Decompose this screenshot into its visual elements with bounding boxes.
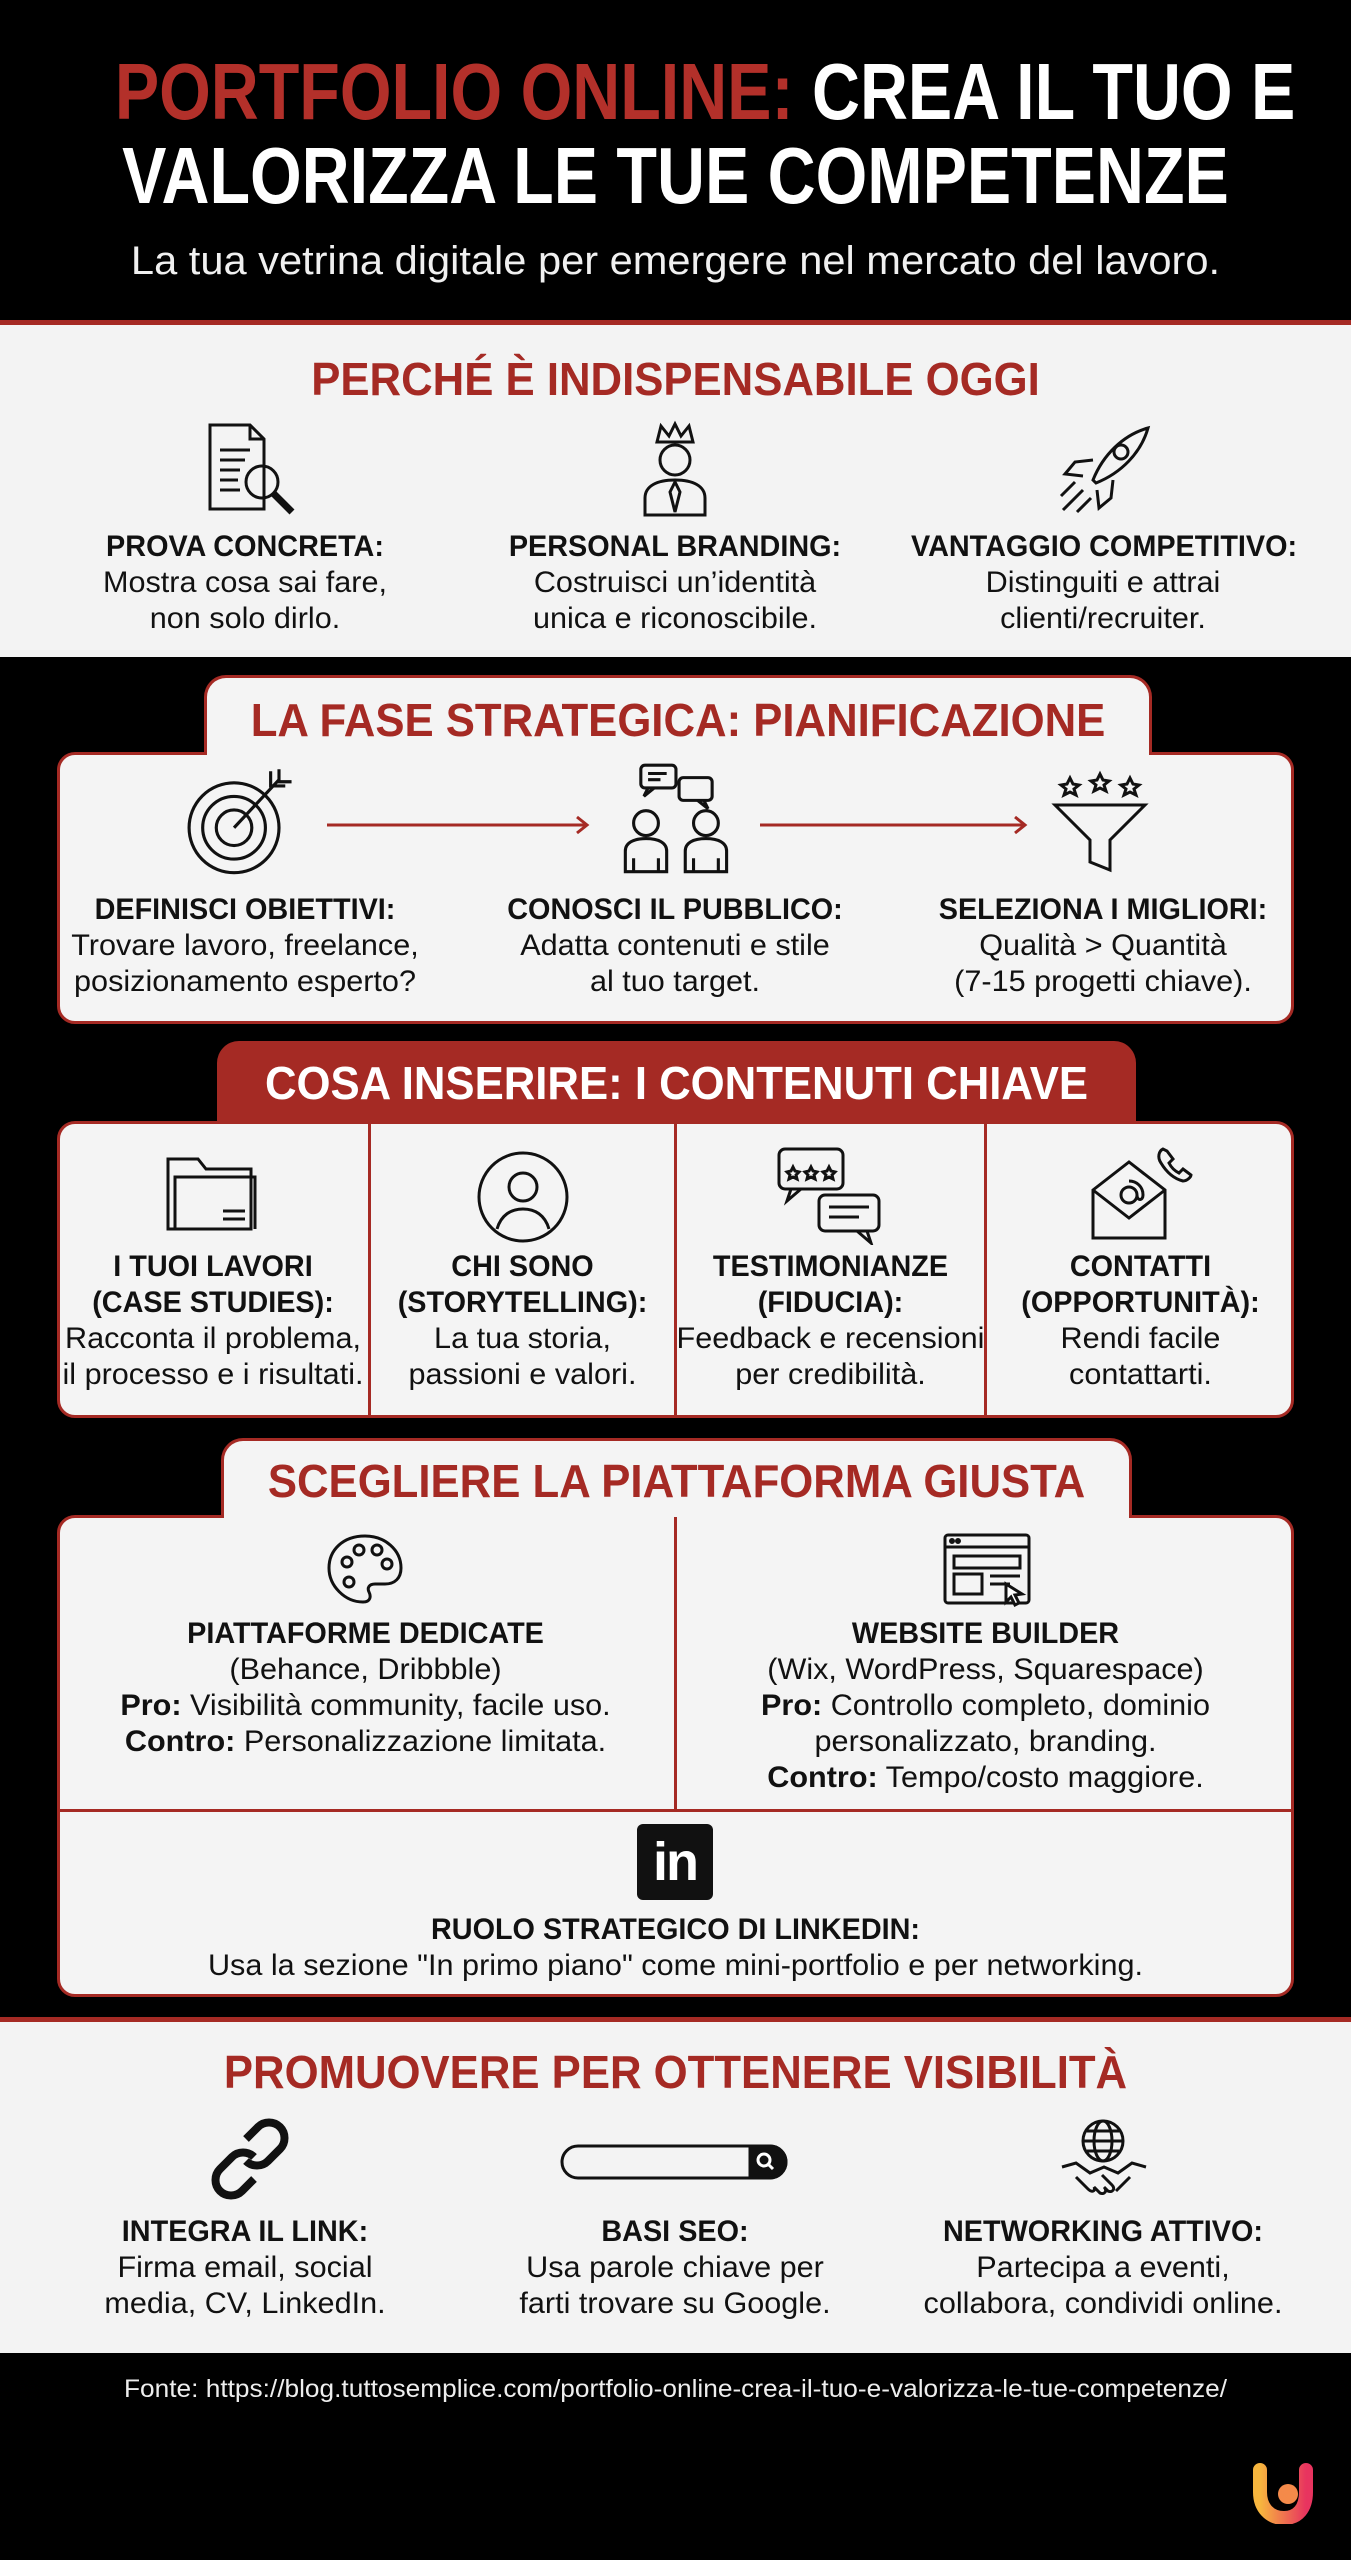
text: RUOLO STRATEGICO DI LINKEDIN: [431, 1913, 920, 1946]
tab heading red: COSA INSERIRE: I CONTENUTI CHIAVE [265, 1057, 1088, 1109]
col: testimonianze [677, 1148, 984, 1391]
icon: crowned person [644, 420, 706, 516]
text: NETWORKING ATTIVO: [943, 2215, 1263, 2248]
panel: piattaforma [57, 1438, 1294, 1997]
logo [1250, 2462, 1316, 2524]
text: passioni e valori. [409, 1358, 636, 1391]
icon: globe handshake [1058, 2117, 1148, 2202]
text: obiettivi [71, 893, 419, 998]
icon: folder [166, 1158, 256, 1230]
text: Mostra cosa sai fare, [103, 566, 387, 599]
icon: linkedin: in [653, 1832, 697, 1892]
text: Feedback e recensioni [677, 1322, 984, 1355]
heading: PROMUOVERE PER OTTENERE VISIBILITÀ [224, 2046, 1127, 2098]
text: Rendi facile [1061, 1322, 1220, 1355]
icon: envelope phone [1092, 1147, 1192, 1240]
header [0, 0, 1351, 320]
text: WEBSITE BUILDER [852, 1617, 1119, 1650]
icon: target [188, 769, 292, 874]
text [120, 1617, 611, 1758]
tab heading [221, 1438, 1132, 1520]
item: link [45, 2117, 445, 2347]
icon: funnel stars [1052, 770, 1148, 872]
text: (Behance, Dribbble) [229, 1653, 502, 1686]
text: Distinguiti e attrai [986, 566, 1220, 599]
icon: person circle [478, 1152, 568, 1242]
text: TESTIMONIANZE [713, 1250, 948, 1283]
tab heading: LA FASE STRATEGICA: PIANIFICAZIONE [251, 694, 1105, 746]
text [475, 2214, 875, 2322]
text: PIATTAFORME DEDICATE [187, 1617, 544, 1650]
panel: fase strategica [57, 675, 1294, 1024]
heading: PERCHÉ È INDISPENSABILE OGGI [311, 353, 1040, 405]
text: pubblico: al tuo target. [590, 965, 760, 998]
tab heading [204, 675, 1152, 757]
linkedin row [208, 1824, 1143, 1982]
section: promuovere [0, 2022, 1351, 2353]
text: Pro: Visibilità community, facile uso. [120, 1689, 611, 1722]
text [57, 1912, 1294, 1984]
icon: audience [624, 764, 728, 874]
text: clienti/recruiter. [1000, 602, 1206, 635]
text [911, 530, 1297, 635]
text: Usa parole chiave per [526, 2251, 824, 2284]
col: contatti [1021, 1147, 1260, 1391]
tab heading red [217, 1041, 1136, 1131]
text: BASI SEO: [601, 2215, 749, 2248]
text: CHI SONO [451, 1250, 594, 1283]
icon: browser [944, 1534, 1030, 1607]
text: (CASE STUDIES): [92, 1286, 334, 1319]
text: migliori: SELEZIONA I MIGLIORI: [939, 893, 1267, 926]
text: (Wix, WordPress, Squarespace) [767, 1653, 1204, 1686]
text [761, 1617, 1210, 1794]
text: migliori: Qualità > Quantità [979, 929, 1227, 962]
col: lavori [62, 1158, 363, 1391]
text: I TUOI LAVORI [113, 1250, 313, 1283]
arrow 1 [327, 816, 590, 834]
text: Usa la sezione "In primo piano" come mini-portfolio e per networking. [208, 1949, 1143, 1982]
section: perché [0, 325, 1351, 657]
text: migliori [939, 893, 1267, 998]
text: media, CV, LinkedIn. [104, 2287, 386, 2320]
arrow 2 [760, 816, 1028, 834]
item: networking [903, 2117, 1303, 2347]
text [903, 2214, 1303, 2322]
text: Contro: Tempo/costo maggiore. [767, 1761, 1204, 1794]
icon: document magnifier [208, 424, 294, 514]
icon: search bar [560, 2142, 790, 2182]
text: VANTAGGIO COMPETITIVO: [911, 530, 1297, 563]
icon: palette [328, 1534, 402, 1604]
text: unica e riconoscibile. [533, 602, 817, 635]
text: per credibilità. [735, 1358, 926, 1391]
footer source: Fonte: https://blog.tuttosemplice.com/portfolio-online-crea-il-tuo-e-valorizza-le-tue-competenze/ [124, 2375, 1227, 2403]
title: PORTFOLIO ONLINE: CREA IL TUO E [115, 47, 1295, 136]
item: prova concreta [103, 424, 387, 635]
col: chi sono [398, 1152, 647, 1391]
text: obiettivi: posizionamento esperto? [74, 965, 416, 998]
text: obiettivi: DEFINISCI OBIETTIVI: [95, 893, 395, 926]
text: (STORYTELLING): [398, 1286, 647, 1319]
icon: rocket [1060, 426, 1150, 513]
tab heading: SCEGLIERE LA PIATTAFORMA GIUSTA [268, 1455, 1085, 1507]
subtitle: La tua vetrina digitale per emergere nel mercato del lavoro. [131, 239, 1220, 283]
text: migliori: (7-15 progetti chiave). [954, 965, 1252, 998]
text: pubblico: Adatta contenuti e stile [520, 929, 830, 962]
item: seo [475, 2117, 875, 2347]
text: collabora, condividi online. [924, 2287, 1282, 2320]
text: Costruisci un’identità [534, 566, 816, 599]
text: pubblico [507, 893, 843, 998]
col: piattaforme dedicate [120, 1534, 611, 1758]
text: PERSONAL BRANDING: [509, 530, 841, 563]
title: VALORIZZA LE TUE COMPETENZE [122, 131, 1229, 220]
icon: chain [210, 2117, 290, 2202]
text [45, 2214, 445, 2322]
text: Racconta il problema, [65, 1322, 361, 1355]
text: La tua storia, [434, 1322, 611, 1355]
icon: linkedin [637, 1824, 713, 1900]
text: farti trovare su Google. [519, 2287, 831, 2320]
text: il processo e i risultati. [62, 1358, 363, 1391]
text: Contro: Personalizzazione limitata. [125, 1725, 606, 1758]
text [62, 1250, 363, 1391]
text [509, 530, 841, 635]
text [677, 1250, 984, 1391]
title [115, 47, 1295, 220]
text: (FIDUCIA): [758, 1286, 903, 1319]
text: INTEGRA IL LINK: [122, 2215, 368, 2248]
text: personalizzato, branding. [815, 1725, 1156, 1758]
text: contattarti. [1069, 1358, 1212, 1391]
text: non solo dirlo. [150, 602, 340, 635]
text: CONTATTI [1070, 1250, 1211, 1283]
text: obiettivi: Trovare lavoro, freelance, [71, 929, 419, 962]
item: vantaggio [911, 426, 1297, 635]
item: personal branding [509, 420, 841, 635]
icon: review bubbles [778, 1148, 880, 1245]
text: Firma email, social [117, 2251, 373, 2284]
text [398, 1250, 647, 1391]
text: pubblico: CONOSCI IL PUBBLICO: [507, 893, 843, 926]
text: (OPPORTUNITÀ): [1021, 1286, 1260, 1319]
text: PROVA CONCRETA: [106, 530, 384, 563]
panel: contenuti chiave [57, 1041, 1294, 1418]
text [1021, 1250, 1260, 1391]
text [103, 530, 387, 635]
text: Pro: Controllo completo, dominio [761, 1689, 1210, 1722]
text: Partecipa a eventi, [976, 2251, 1230, 2284]
col: website builder [761, 1534, 1210, 1794]
